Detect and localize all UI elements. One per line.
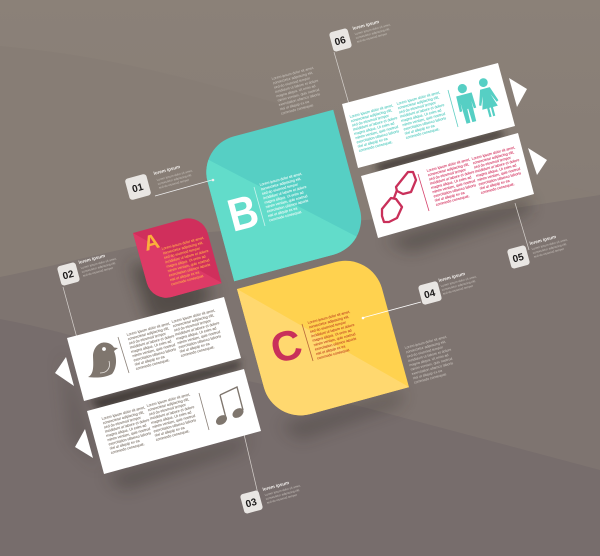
caption 02: lorem ipsum xyxy=(78,253,106,265)
panel C lower facet xyxy=(237,289,409,416)
text: column 2: sed do eiusmod tempor xyxy=(399,101,437,114)
arrow: panel 03 xyxy=(75,429,93,458)
letter A: A xyxy=(141,230,162,256)
caption 02: Lorem ipsum dolor sit amet, xyxy=(80,256,117,270)
text: column 2: magna aliqua. Ut enim ad xyxy=(151,410,192,425)
text block: above B: exercitation ullamco laboris xyxy=(278,92,321,107)
text: column 1: consectetur adipiscing elit, xyxy=(350,108,393,123)
panel C text: magna aliqua. Ut enim ad xyxy=(312,328,352,343)
panel A xyxy=(133,218,222,298)
panel A text: commodo consequat. xyxy=(171,274,205,287)
panel C text: sed do eiusmod tempor xyxy=(310,320,347,334)
text: column 2: minim veniam, quis nostrud xyxy=(177,330,221,345)
text: column 1: incididunt ut labore et dolore xyxy=(130,334,175,350)
letter C: C xyxy=(266,319,307,373)
text: column 1: Lorem ipsum dolor sit amet, xyxy=(349,103,394,119)
panel B text: consectetur adipiscing elit, xyxy=(260,177,302,191)
panel C text: consectetur adipiscing elit, xyxy=(308,315,350,329)
panel B text: magna aliqua. Ut enim ad xyxy=(264,190,304,205)
text: column 2: exercitation ullamco laboris xyxy=(478,171,522,186)
text: column 2: consectetur adipiscing elit, xyxy=(147,397,190,412)
connector line: 02 xyxy=(63,287,77,338)
text: column 2: commodo consequat. xyxy=(405,127,440,140)
panel C text: incididunt ut labore et dolore xyxy=(311,323,355,338)
caption 03: sed do eiusmod tempor xyxy=(266,493,298,505)
panel B text: exercitation ullamco laboris xyxy=(266,199,309,214)
text block: above B: magna aliqua. Ut enim ad xyxy=(276,84,316,98)
icon: music notes xyxy=(214,387,245,427)
text block: right of C: consectetur adipiscing elit, xyxy=(405,340,447,354)
caption 02: sed do eiusmod tempor xyxy=(82,266,114,278)
panel B divider xyxy=(254,187,265,226)
arrow: panel 06 xyxy=(509,78,527,107)
text: column 1: exercitation ullamco laboris xyxy=(133,347,177,362)
panel 02: bird xyxy=(67,297,241,401)
text: column 1: Lorem ipsum dolor sit amet, xyxy=(101,405,146,421)
badge 06 xyxy=(329,28,352,52)
text: column 1: exercitation ullamco laboris xyxy=(356,129,400,144)
text: column 2: sed do eiusmod tempor xyxy=(474,156,512,169)
text: column 2: commodo consequat. xyxy=(155,429,190,442)
text: column 1: minim veniam, quis nostrud xyxy=(432,179,476,194)
panel A text: minim veniam, quis nostrud xyxy=(167,258,210,273)
text block: right of C: Lorem ipsum dolor sit amet, xyxy=(404,335,448,350)
text: column 1: exercitation ullamco laboris xyxy=(433,183,477,198)
text: column 1: incididunt ut labore et dolore xyxy=(353,116,398,132)
text: column 2: sed do eiusmod tempor xyxy=(149,403,187,416)
panel B text: nisi ut aliquip ex ea xyxy=(268,206,298,218)
text: column 1: nisi ut aliquip ex ea xyxy=(109,439,141,451)
text: column 2: consectetur adipiscing elit, xyxy=(397,95,440,110)
text: column 1: consectetur adipiscing elit, xyxy=(427,162,470,177)
text: column 2: minim veniam, quis nostrud xyxy=(152,414,196,429)
panel C xyxy=(237,260,409,416)
text: column 2: minim veniam, quis nostrud xyxy=(402,112,446,127)
text: column 2: nisi ut aliquip ex ea xyxy=(179,342,211,354)
text: column 1: Lorem ipsum dolor sit amet, xyxy=(426,157,471,173)
caption 06: sed do eiusmod tempor xyxy=(356,32,388,44)
connector line: 04 to C xyxy=(362,302,421,319)
text: column 1: consectetur adipiscing elit, xyxy=(127,326,170,341)
text block: right of C: commodo consequat. xyxy=(414,372,447,385)
text: column 2: magna aliqua. Ut enim ad xyxy=(176,326,217,341)
text: column 2: magna aliqua. Ut enim ad xyxy=(476,163,517,178)
text: column 2: Lorem ipsum dolor sit amet, xyxy=(471,145,516,161)
text: column 1: sed do eiusmod tempor xyxy=(352,114,390,127)
text: column 1: nisi ut aliquip ex ea xyxy=(357,137,389,149)
caption 05 xyxy=(529,234,570,259)
caption 03: Lorem ipsum dolor sit amet, xyxy=(264,483,301,497)
text: column 1: commodo consequat. xyxy=(135,358,170,371)
text: column 1: exercitation ullamco laboris xyxy=(108,431,152,446)
text: column 1: magna aliqua. Ut enim ad xyxy=(431,175,472,190)
text: column 2: nisi ut aliquip ex ea xyxy=(479,179,511,191)
caption 06 xyxy=(352,19,393,44)
text block: above B: nisi ut aliquip ex ea xyxy=(279,100,310,111)
panel A text: magna aliqua. Ut enim ad xyxy=(166,254,206,269)
caption 02 xyxy=(78,253,119,278)
text: column 1: incididunt ut labore et dolore xyxy=(105,418,150,434)
badge 03 xyxy=(240,490,263,514)
icon: bird xyxy=(88,342,118,378)
text: column 2: commodo consequat. xyxy=(180,345,215,358)
text: column 2: commodo consequat. xyxy=(480,182,515,195)
text: column 1: commodo consequat. xyxy=(435,194,470,207)
text: column 2: incididunt ut labore et dolore xyxy=(400,103,445,119)
caption 05: lorem ipsum xyxy=(529,234,557,246)
panel B text: incididunt ut labore et dolore xyxy=(263,185,307,200)
caption 05: consectetur adipiscing elit, xyxy=(532,242,567,255)
caption 05: sed do eiusmod tempor xyxy=(533,247,565,259)
caption 06: lorem ipsum xyxy=(352,19,380,31)
caption 05: Lorem ipsum dolor sit amet, xyxy=(531,237,568,251)
text: column 1: incididunt ut labore et dolore xyxy=(430,170,475,186)
text: column 2: exercitation ullamco laboris xyxy=(153,418,197,433)
panel C text: Lorem ipsum dolor sit amet, xyxy=(307,310,351,325)
badge 05 xyxy=(507,245,530,269)
caption 03: consectetur adipiscing elit, xyxy=(265,488,300,501)
panel 06: people xyxy=(342,63,515,168)
panel C text: commodo consequat. xyxy=(317,348,351,361)
badge 02: 02 xyxy=(62,269,76,282)
connector line: 03 xyxy=(243,430,258,494)
text: column 2: sed do eiusmod tempor xyxy=(174,319,212,332)
text: column 2: incididunt ut labore et dolore xyxy=(175,321,220,337)
text: column 1: minim veniam, quis nostrud xyxy=(355,125,399,140)
panel B lower facet xyxy=(206,160,356,282)
caption 01: lorem ipsum xyxy=(153,164,181,176)
text: column 2: nisi ut aliquip ex ea xyxy=(154,426,186,438)
caption 04: Lorem ipsum dolor sit amet, xyxy=(440,274,477,288)
text block: above B: commodo consequat. xyxy=(281,103,314,116)
panel 05: glasses xyxy=(361,133,534,238)
text: column 2: consectetur adipiscing elit, xyxy=(172,313,215,328)
arrow: panel 02 xyxy=(55,357,74,386)
caption 04: sed do eiusmod tempor xyxy=(442,284,474,296)
text: column 2: minim veniam, quis nostrud xyxy=(477,167,521,182)
letter B: B xyxy=(223,185,264,242)
caption 04: consectetur adipiscing elit, xyxy=(441,279,476,292)
text: column 2: incididunt ut labore et dolore xyxy=(150,405,195,421)
badge 02 xyxy=(57,262,80,286)
panel A text: sed do eiusmod tempor xyxy=(164,246,201,260)
text: column 1: nisi ut aliquip ex ea xyxy=(134,355,166,367)
panel A text: Lorem ipsum dolor sit amet, xyxy=(161,236,205,251)
caption 01 xyxy=(153,164,195,190)
badge 04 xyxy=(418,281,442,305)
panel C text: exercitation ullamco laboris xyxy=(314,337,357,352)
caption 06: Lorem ipsum dolor sit amet, xyxy=(354,22,391,36)
connector line: 01 to B xyxy=(155,179,214,196)
text: column 2: magna aliqua. Ut enim ad xyxy=(401,108,442,123)
panel C divider xyxy=(302,324,313,361)
panel A text: nisi ut aliquip ex ea xyxy=(170,270,200,282)
text: column 1: commodo consequat. xyxy=(358,140,393,153)
text: column 1: minim veniam, quis nostrud xyxy=(107,427,151,442)
text: column 1: consectetur adipiscing elit, xyxy=(102,410,145,425)
panel B text: minim veniam, quis nostrud xyxy=(265,194,308,209)
text block: right of C: nisi ut aliquip ex ea xyxy=(412,369,443,380)
text block: right of C: magna aliqua. Ut enim ad xyxy=(409,353,449,367)
text block: above B: consectetur adipiscing elit, xyxy=(272,71,314,85)
badge 03: 03 xyxy=(245,497,259,510)
caption 01: Lorem ipsum dolor sit amet, xyxy=(156,168,193,182)
text: column 2: Lorem ipsum dolor sit amet, xyxy=(146,392,191,408)
arrow: panel 05 xyxy=(528,148,547,175)
text: column 1: magna aliqua. Ut enim ad xyxy=(354,121,395,136)
shadows xyxy=(60,130,530,490)
text: column 2: Lorem ipsum dolor sit amet, xyxy=(396,90,441,106)
panel B text: Lorem ipsum dolor sit amet, xyxy=(259,172,303,187)
panel A text: exercitation ullamco laboris xyxy=(168,263,211,278)
caption 04 xyxy=(438,271,479,296)
caption 04: lorem ipsum xyxy=(438,271,466,283)
text: column 1: Lorem ipsum dolor sit amet, xyxy=(126,321,171,337)
panel A text: incididunt ut labore et dolore xyxy=(165,249,209,264)
text: column 2: exercitation ullamco laboris xyxy=(178,334,222,349)
caption 03 xyxy=(262,480,303,505)
caption 02: consectetur adipiscing elit, xyxy=(81,261,116,274)
badge 01 xyxy=(125,174,151,200)
caption 01: sed do eiusmod tempor xyxy=(158,178,190,190)
text: column 1: magna aliqua. Ut enim ad xyxy=(106,423,147,438)
panel C text: minim veniam, quis nostrud xyxy=(313,332,356,347)
text block: above B: minim veniam, quis nostrud xyxy=(277,88,320,103)
text block: right of C: sed do eiusmod tempor xyxy=(407,345,444,359)
text: column 1: commodo consequat. xyxy=(110,442,145,455)
panel B xyxy=(206,110,362,282)
panel A lower facet xyxy=(133,233,222,298)
connector line: 06 xyxy=(334,52,349,104)
badge 05: 05 xyxy=(512,252,526,265)
text: column 1: minim veniam, quis nostrud xyxy=(132,343,176,358)
text block: right of C: incididunt ut labore et dolore xyxy=(408,348,452,363)
text block: above B: Lorem ipsum dolor sit amet, xyxy=(271,66,315,81)
panel A text: consectetur adipiscing elit, xyxy=(162,241,204,255)
panel 03: music xyxy=(87,369,261,474)
text block: above B: sed do eiusmod tempor xyxy=(274,76,311,90)
panel B text: sed do eiusmod tempor xyxy=(262,182,299,196)
caption 03: lorem ipsum xyxy=(262,480,290,492)
text block: right of C: minim veniam, quis nostrud xyxy=(410,357,453,372)
text: column 1: magna aliqua. Ut enim ad xyxy=(131,339,172,354)
text block: above B: incididunt ut labore et dolore xyxy=(275,79,319,94)
text: column 2: consectetur adipiscing elit, xyxy=(472,150,515,165)
badge 04: 04 xyxy=(423,288,437,301)
text: column 1: nisi ut aliquip ex ea xyxy=(434,191,466,203)
panel B text: commodo consequat. xyxy=(269,210,303,223)
badge 01: 01 xyxy=(131,182,145,195)
text: column 1: sed do eiusmod tempor xyxy=(429,168,467,181)
text: column 2: incididunt ut labore et dolore xyxy=(475,158,520,174)
text: column 1: sed do eiusmod tempor xyxy=(104,416,142,429)
panel C text: nisi ut aliquip ex ea xyxy=(316,344,346,356)
text block: right of C: exercitation ullamco laboris xyxy=(411,361,454,376)
icon: woman xyxy=(473,76,502,119)
icon: glasses xyxy=(382,172,416,222)
connector line: 05 xyxy=(515,203,529,250)
text: column 2: exercitation ullamco laboris xyxy=(403,116,447,131)
caption 01: consectetur adipiscing elit, xyxy=(157,173,192,186)
text: column 2: Lorem ipsum dolor sit amet, xyxy=(171,308,216,324)
text: column 2: nisi ut aliquip ex ea xyxy=(404,124,436,136)
caption 06: consectetur adipiscing elit, xyxy=(355,27,390,40)
icon: man xyxy=(453,82,480,125)
badge 06: 06 xyxy=(334,35,348,48)
text: column 1: sed do eiusmod tempor xyxy=(129,332,167,345)
